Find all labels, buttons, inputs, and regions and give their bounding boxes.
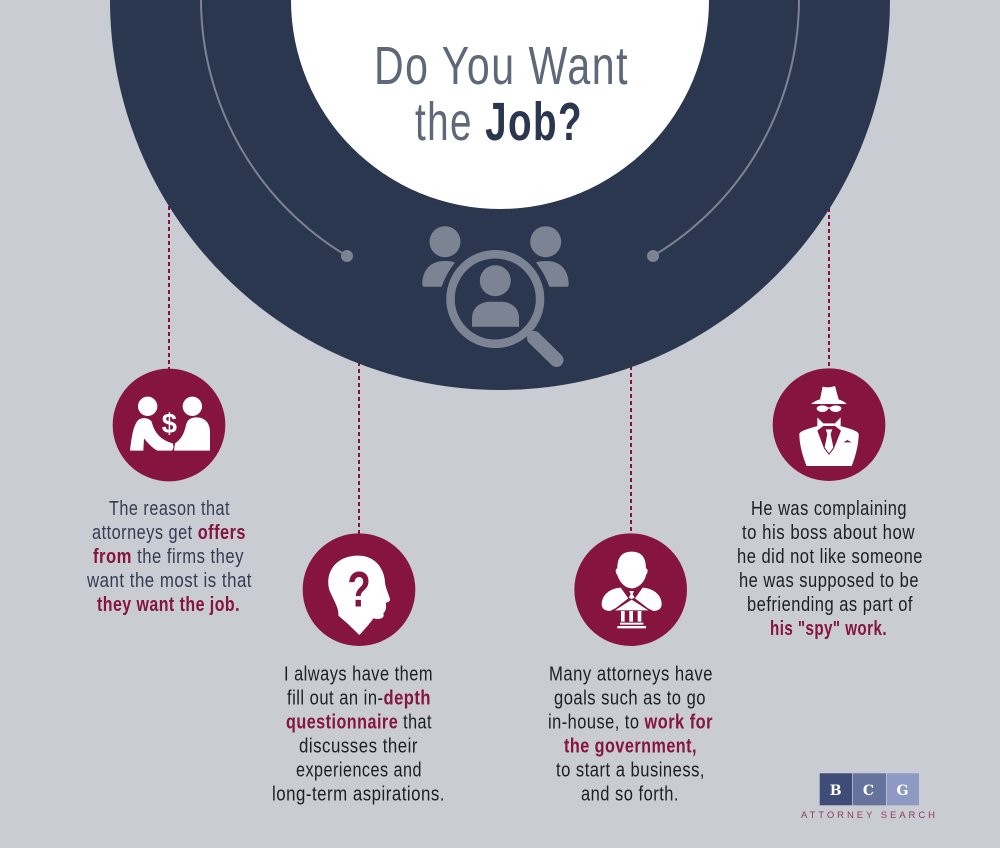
logo: BCG Attorney Search: C [863, 783, 874, 799]
title: the Job? [415, 92, 583, 152]
text: questionnaire: experiences and [296, 760, 422, 782]
logo: BCG Attorney Search: B [830, 783, 842, 799]
text: attorney goals: goals such as to go [554, 688, 706, 710]
text: questionnaire: long-term aspirations. [272, 784, 445, 806]
title: Do You Want [374, 36, 629, 96]
text: questionnaire: questionnaire that [286, 712, 432, 734]
text: attorney goals: and so forth. [581, 784, 679, 806]
text: attorney goals: to start a business, [556, 760, 705, 782]
text: attorney goals: the government, [564, 736, 697, 758]
icon: head with question mark: ? [347, 562, 371, 618]
text: questionnaire: discusses their [299, 736, 418, 758]
text: questionnaire: I always have them [284, 664, 433, 686]
text: spy work: he was supposed to be [739, 570, 919, 592]
text: reason attorneys get offers: from the firms they [93, 546, 244, 568]
text: reason attorneys get offers: The reason that [109, 498, 230, 520]
text: attorney goals: Many attorneys have [549, 664, 713, 686]
text: attorney goals [548, 664, 713, 806]
text: spy work: to his boss about how [742, 522, 915, 544]
logo: BCG Attorney Search: ATTORNEY SEARCH [801, 810, 935, 821]
logo: BCG Attorney Search [801, 773, 935, 821]
text: spy work: he did not like someone [737, 546, 923, 568]
title [374, 36, 629, 152]
text: spy work: He was complaining [751, 498, 907, 520]
text: reason attorneys get offers: they want the job. [97, 594, 240, 616]
text: spy work: his "spy" work. [770, 618, 887, 640]
navy ring with title disc [110, 0, 890, 390]
logo: BCG Attorney Search: G [897, 783, 908, 799]
text: reason attorneys get offers: want the most is that [86, 570, 252, 592]
text: attorney goals: in-house, to work for [548, 712, 713, 734]
dashed connector lines [169, 206, 829, 535]
text: questionnaire: fill out an in-depth [287, 688, 431, 710]
text: questionnaire [272, 664, 445, 806]
icon: handshake with dollar [113, 369, 225, 481]
text: reason attorneys get offers: attorneys get offers [92, 522, 246, 544]
icon: attorney with courthouse [574, 533, 687, 646]
text: spy work: befriending as part of [747, 594, 913, 616]
text: reason attorneys get offers [86, 498, 252, 616]
text: spy work [737, 498, 923, 640]
icon: people under magnifying glass [422, 226, 569, 360]
icon: head with question mark [303, 533, 415, 646]
icon: handshake with dollar: $ [162, 408, 177, 439]
icon: spy in hat [773, 368, 885, 481]
